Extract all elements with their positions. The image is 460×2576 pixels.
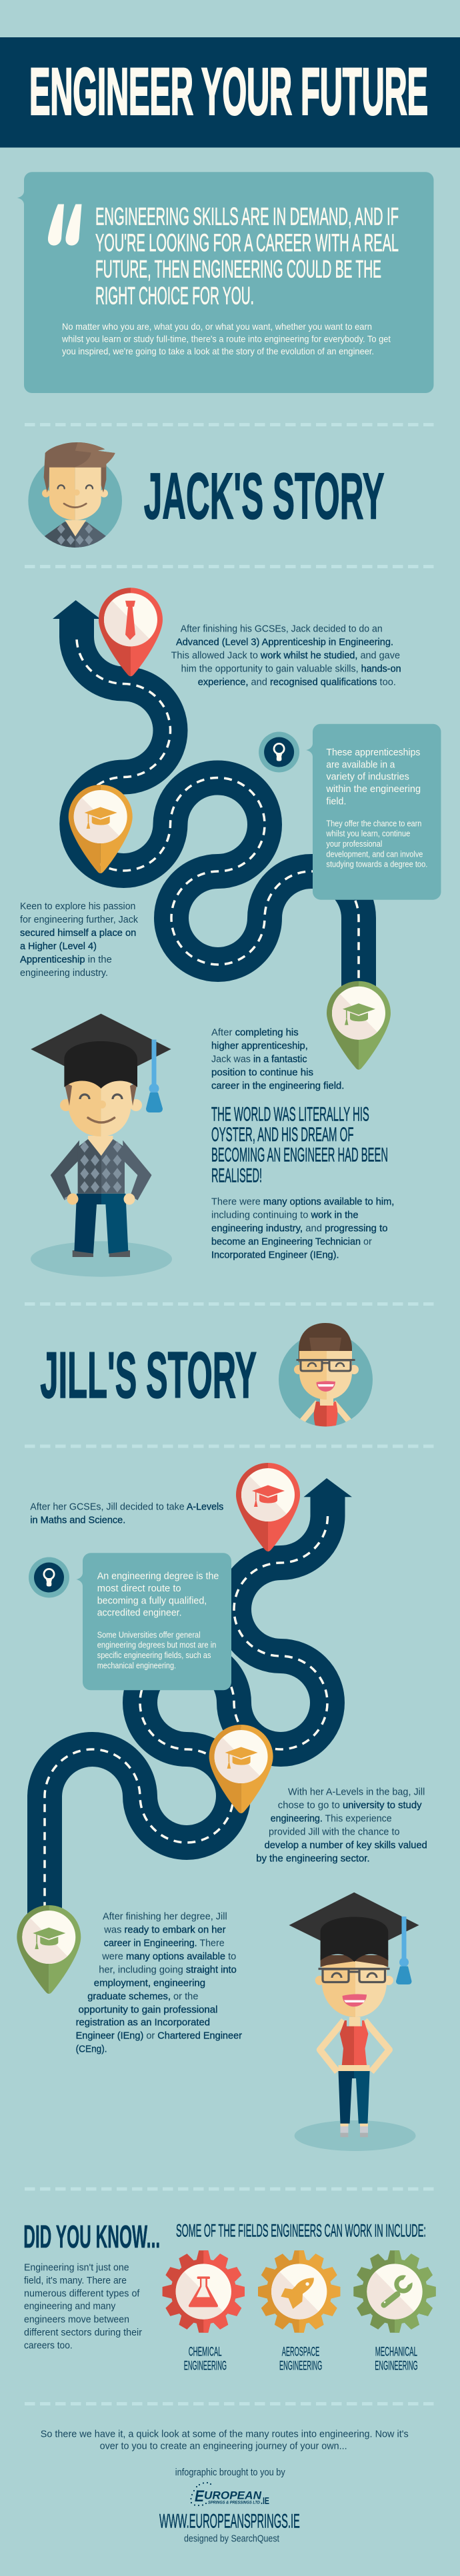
text: did you know: numerous different types of bbox=[24, 2288, 140, 2299]
pin: graduation red bbox=[236, 1463, 300, 1551]
text: Jill university bbox=[256, 1786, 427, 1864]
text: Jack after apprenticeship: Jack was in a fantastic bbox=[211, 1053, 307, 1065]
text: Jack options: Incorporated Engineer (IEng). bbox=[211, 1249, 339, 1260]
logo: European Springs: .IE bbox=[261, 2495, 269, 2507]
intro heading bbox=[95, 203, 399, 310]
text: Jack higher apprenticeship: a Higher (Level 4) bbox=[20, 941, 97, 952]
pin: graduation orange bbox=[209, 1725, 273, 1813]
text: Jill career: employment, engineering bbox=[94, 1977, 205, 1988]
text: Jack after apprenticeship: career in the engineering field. bbox=[211, 1080, 344, 1091]
text: Jack options bbox=[211, 1196, 394, 1260]
icon: flask bbox=[189, 2276, 218, 2307]
text: Jill career: were many options available to bbox=[101, 1950, 236, 1962]
text: Jill university: With her A-Levels in the bag, Jill bbox=[288, 1786, 425, 1797]
text: Jack apprenticeship: experience, and recognised qualifications too. bbox=[198, 676, 396, 687]
text: Jill career: opportunity to gain professional bbox=[79, 2004, 217, 2015]
text: Jack apprenticeship: This allowed Jack to work whilst he studied, and gave bbox=[171, 649, 400, 661]
text: Jill A-levels: After her GCSEs, Jill decided to take A-Levels bbox=[30, 1502, 223, 1513]
text: Jill university: by the engineering sector. bbox=[256, 1853, 370, 1864]
text: Jack after apprenticeship: After completing his bbox=[211, 1027, 299, 1038]
text: Jill career: was ready to embark on her bbox=[103, 1924, 225, 1935]
text: Jack higher apprenticeship: secured himself a place on bbox=[20, 927, 136, 939]
callout heading text: These apprenticeships bbox=[326, 747, 420, 758]
callout heading text: variety of industries bbox=[326, 771, 409, 783]
icon: chemical gear bbox=[163, 2250, 245, 2333]
text: Jill university: provided Jill with the chance to bbox=[269, 1826, 400, 1837]
text: WWW.EUROPEANSPRINGS.IE bbox=[159, 2510, 300, 2532]
labels: fields: ENGINEERING bbox=[279, 2358, 322, 2373]
callout heading text: accredited engineer. bbox=[97, 1607, 181, 1619]
callout body text: mechanical engineering. bbox=[97, 1661, 176, 1670]
pin: graduation orange bbox=[69, 785, 133, 873]
icon: Jill avatar bbox=[279, 1323, 373, 1429]
subheading: oyster: REALISED! bbox=[211, 1164, 262, 1186]
text: Jill career: graduate schemes, or the bbox=[87, 1990, 199, 2002]
text: did you know: Engineering isn't just one bbox=[24, 2262, 129, 2273]
callout body text: whilst you learn, continue bbox=[326, 829, 410, 839]
labels: fields: ENGINEERING bbox=[184, 2358, 227, 2373]
character: Jill graduate bbox=[289, 1893, 419, 2151]
icon: tie bbox=[125, 601, 135, 640]
icon: quote mark bbox=[48, 204, 81, 245]
callout body text: development, and can involve bbox=[326, 849, 423, 859]
text: Jack options: become an Engineering Technician or bbox=[211, 1236, 372, 1247]
intro paragraph: you inspired, we're going to take a look at the story of the evolution of an engineer. bbox=[62, 346, 374, 356]
logo: European Springs: E bbox=[195, 2487, 205, 2505]
pin: tie bbox=[99, 588, 163, 676]
text: credit: infographic brought to you by bbox=[175, 2467, 285, 2478]
text: designer: designed by SearchQuest bbox=[184, 2533, 280, 2545]
callout heading text: most direct route to bbox=[97, 1583, 181, 1594]
text: Jack apprenticeship: him the opportunity to gain valuable skills, hands-on bbox=[181, 663, 401, 674]
icon: light bulb Jill bbox=[29, 1557, 69, 1597]
text: Jill career bbox=[76, 1911, 242, 2055]
text: did you know: careers too. bbox=[24, 2340, 73, 2352]
text: closing: So there we have it, a quick look at some of the many routes into engineering. Now it's bbox=[41, 2428, 409, 2439]
text: Jack higher apprenticeship bbox=[20, 901, 138, 979]
pin: graduation green bbox=[17, 1905, 81, 1994]
intro paragraph: No matter who you are, what you do, or what you want, whether you want to earn bbox=[62, 321, 372, 332]
text: Jill university: develop a number of key skills valued bbox=[265, 1839, 427, 1851]
text: did you know: field, it's many. There are bbox=[24, 2275, 127, 2286]
labels: fields: MECHANICAL bbox=[375, 2345, 417, 2360]
text: Jack options: including continuing to work in the bbox=[211, 1209, 359, 1220]
icon: rocket bbox=[281, 2278, 314, 2309]
text: Jill career: her, including going straight into bbox=[99, 1964, 237, 1975]
callout body text: engineering degrees but most are in bbox=[97, 1641, 216, 1650]
panel: apprenticeship callout bbox=[305, 724, 441, 900]
text: did you know bbox=[24, 2262, 142, 2352]
icon: Jack avatar bbox=[28, 442, 122, 556]
labels: fields bbox=[184, 2345, 418, 2373]
text: Jill A-levels: in Maths and Science. bbox=[30, 1515, 125, 1526]
text: Jack options: engineering industry, and progressing to bbox=[211, 1222, 388, 1234]
text: Jack higher apprenticeship: engineering industry. bbox=[20, 967, 108, 979]
intro paragraph: whilst you learn or study full-time, there's a route into engineering for everybody. To get bbox=[61, 333, 391, 344]
intro paragraph bbox=[61, 321, 391, 356]
panel: intro quote bbox=[16, 172, 433, 393]
logo: European Springs: UROPEAN bbox=[204, 2489, 262, 2502]
callout body text: specific engineering fields, such as bbox=[97, 1651, 211, 1660]
callout body text: They offer the chance to earn bbox=[326, 819, 421, 829]
text: Jack apprenticeship: After finishing his GCSEs, Jack decided to do an bbox=[181, 623, 383, 634]
subheading: oyster bbox=[211, 1103, 388, 1186]
logo: European Springs bbox=[190, 2482, 269, 2507]
callout heading text: An engineering degree is the bbox=[97, 1571, 219, 1582]
icon: mechanical gear bbox=[353, 2250, 436, 2333]
panel: degree callout bbox=[75, 1553, 231, 1690]
text: Jill university: engineering. This experience bbox=[271, 1813, 392, 1824]
text: Jill career: registration as an Incorporated bbox=[76, 2017, 210, 2028]
callout body text: your professional bbox=[326, 839, 382, 849]
text: Jack after apprenticeship bbox=[211, 1027, 344, 1091]
intro heading: RIGHT CHOICE FOR YOU. bbox=[95, 282, 254, 310]
icon: wrench bbox=[384, 2274, 415, 2305]
callout heading text: becoming a fully qualified, bbox=[97, 1595, 207, 1606]
callout body text bbox=[326, 819, 427, 869]
text: Jack apprenticeship: Advanced (Level 3) Apprenticeship in Engineering. bbox=[176, 636, 393, 647]
road: Jill's route with arrow bbox=[45, 1478, 352, 1919]
arrow head bbox=[304, 1478, 352, 1502]
callout heading text bbox=[325, 747, 421, 807]
title banner bbox=[0, 37, 460, 148]
text: Jack higher apprenticeship: for engineering further, Jack bbox=[20, 914, 138, 925]
text: did you know: different sectors during their bbox=[24, 2327, 142, 2338]
character: Jack graduate bbox=[31, 1014, 172, 1277]
text: Jill career: (CEng). bbox=[76, 2044, 107, 2055]
callout heading text: field. bbox=[326, 795, 346, 807]
text: Jill career: Engineer (IEng) or Chartered Engineer bbox=[76, 2030, 242, 2042]
text: did you know: engineering and many bbox=[24, 2301, 116, 2312]
heading: did you know: DID YOU KNOW... bbox=[23, 2220, 160, 2255]
callout heading text: within the engineering bbox=[325, 783, 421, 795]
text: Jill university: chose to go to university to study bbox=[278, 1799, 422, 1811]
text: Jill A-levels bbox=[30, 1502, 223, 1526]
labels: fields: AEROSPACE bbox=[282, 2345, 319, 2360]
text: Jack apprenticeship bbox=[171, 623, 401, 687]
text: closing bbox=[41, 2428, 409, 2452]
callout heading text: are available in a bbox=[326, 759, 395, 770]
text: Jack after apprenticeship: position to continue his bbox=[211, 1067, 313, 1078]
callout heading text bbox=[97, 1571, 219, 1619]
logo: European Springs: SPRINGS & PRESSINGS LTD bbox=[208, 2501, 260, 2505]
labels: fields: CHEMICAL bbox=[189, 2345, 222, 2360]
text: Jack higher apprenticeship: Keen to explore his passion bbox=[20, 901, 135, 912]
road: Jack's route with arrow bbox=[53, 600, 359, 996]
text: did you know: engineers move between bbox=[24, 2314, 129, 2325]
pin: graduation green bbox=[327, 981, 391, 1070]
callout body text: Some Universities offer general bbox=[97, 1630, 201, 1639]
text: Jill career: career in Engineering. There bbox=[104, 1937, 225, 1948]
text: Jill career: After finishing her degree, Jill bbox=[103, 1911, 227, 1922]
text: Jack options: There were many options available to him, bbox=[211, 1196, 394, 1207]
arrow head bbox=[53, 600, 100, 623]
icon: aerospace gear bbox=[258, 2250, 340, 2333]
text: Jack higher apprenticeship: Apprenticeship in the bbox=[20, 954, 112, 965]
callout body text bbox=[97, 1630, 216, 1670]
text: Jack after apprenticeship: higher apprenticeship, bbox=[211, 1040, 308, 1051]
callout body text: studying towards a degree too. bbox=[326, 860, 427, 869]
icon: light bulb Jack bbox=[259, 731, 299, 773]
text: closing: over to you to create an engineering journey of your own... bbox=[100, 2441, 347, 2452]
